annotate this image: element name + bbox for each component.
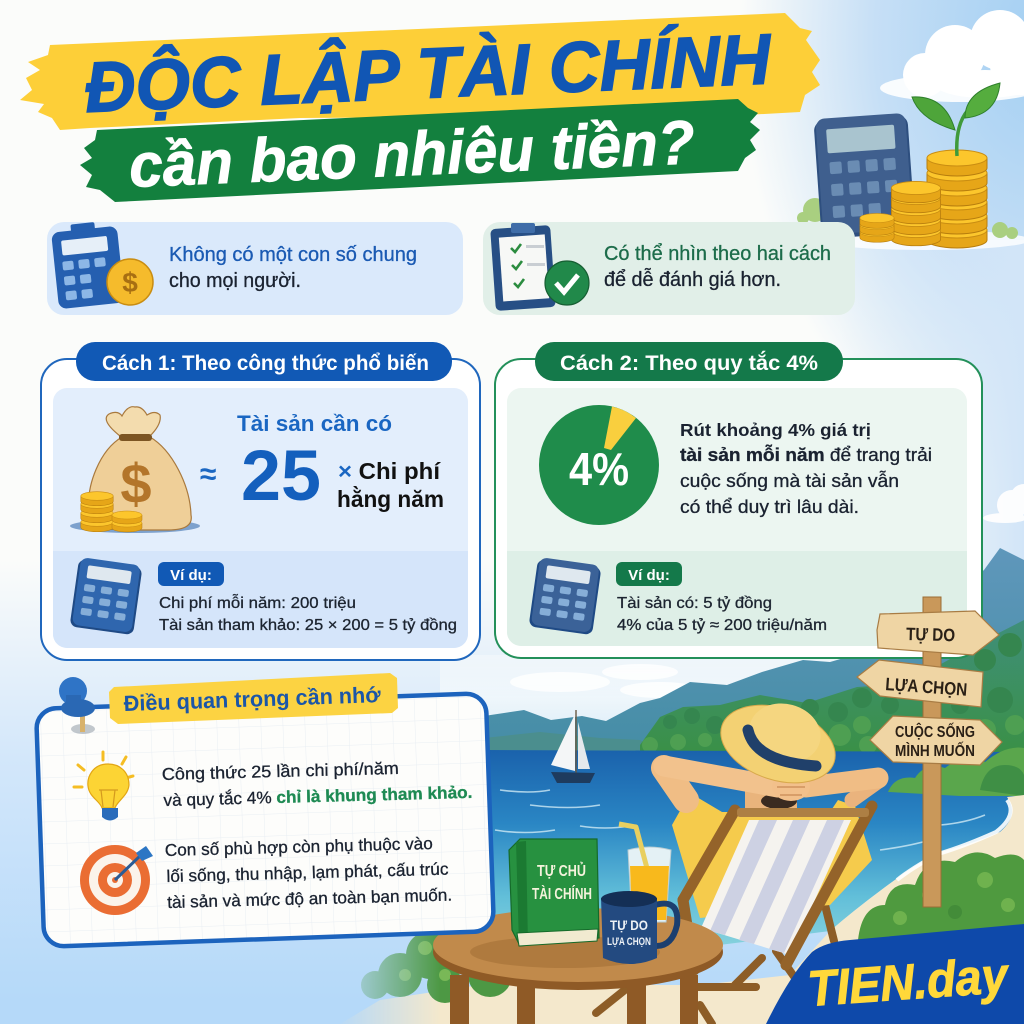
panel: cách 2 — [495, 342, 982, 658]
chair canvas — [701, 820, 851, 955]
sign: lựa chọn: LỰA CHỌN — [885, 674, 968, 700]
illustration: cloud top right — [880, 10, 1024, 102]
note text 1: Công thức 25 lần chi phí/năm — [162, 759, 399, 784]
icon: light bulb — [74, 752, 133, 820]
info box: hai cách: để dễ đánh giá hơn. — [604, 268, 781, 291]
mug: LỰA CHỌN — [607, 936, 651, 948]
info box: không có con số chung: cho mọi người. — [169, 270, 301, 292]
formula: hằng năm — [337, 485, 444, 512]
coin stack medium — [891, 181, 941, 246]
note text 2: lối sống, thu nhập, lạm phát, cấu trúc — [166, 860, 449, 886]
low left shore — [490, 732, 642, 750]
sand beach — [340, 795, 1024, 1024]
illustration: beach scene — [340, 548, 1024, 1024]
pie chart: 4%: 4% — [569, 443, 629, 495]
coin stack tall — [927, 150, 987, 248]
icon: target — [80, 845, 153, 915]
mug — [601, 891, 677, 964]
sign: tự do — [877, 611, 999, 655]
left arm — [664, 768, 686, 800]
yellow label: Điều quan trọng cần nhớ — [123, 682, 381, 716]
title line 2: cần bao nhiêu tiền? — [128, 108, 696, 201]
sky clouds — [510, 664, 700, 698]
small bushes — [797, 198, 1018, 239]
sign: cuộc sống mình muốn: MÌNH MUỐN — [895, 742, 975, 760]
hat crown — [743, 696, 827, 770]
signpost — [857, 597, 1002, 907]
note text 1: và quy tắc 4% chỉ là khung tham khảo. — [163, 783, 473, 810]
icon: clipboard with check — [490, 223, 589, 311]
pie chart: 4% — [539, 405, 659, 525]
note text 2: Con số phù hợp còn phụ thuộc vào — [165, 834, 433, 860]
left bushes — [361, 935, 510, 1003]
description text — [680, 420, 932, 517]
chair frame — [683, 806, 872, 970]
panel: cách 1 — [41, 342, 480, 660]
icon: pushpin — [59, 677, 95, 734]
description text: có thể duy trì lâu dài. — [680, 497, 859, 517]
logo badge: TIEN.day — [766, 924, 1024, 1024]
chair rear legs — [596, 893, 834, 1024]
peninsula bushes — [888, 748, 1024, 796]
sea wave highlights — [495, 790, 985, 850]
info box: hai cách: Có thể nhìn theo hai cách — [604, 243, 831, 265]
example text: Ví dụ: — [628, 567, 670, 584]
note text 2 — [165, 834, 452, 912]
illustration: man relaxing on beach chair — [596, 692, 880, 1024]
sign: tự do: TỰ DO — [906, 624, 955, 645]
hat band — [748, 730, 816, 766]
cloud right edge — [983, 484, 1024, 523]
book — [509, 839, 599, 946]
hat brim — [711, 692, 845, 796]
icon: calculator with coin: $ — [122, 267, 138, 298]
sprout — [912, 83, 1000, 156]
note text 1 — [162, 757, 473, 810]
info box: hai cách — [483, 222, 855, 315]
example text — [158, 562, 457, 634]
example text: Chi phí mỗi năm: 200 triệu — [159, 593, 356, 612]
calculator — [813, 113, 915, 239]
example background — [53, 551, 468, 648]
description text: Rút khoảng 4% giá trị — [680, 420, 871, 440]
pill header — [535, 342, 843, 381]
formula: Tài sản cần có — [237, 411, 392, 436]
formula — [200, 411, 444, 516]
table — [433, 908, 723, 1024]
title line 1: ĐỘC LẬP TÀI CHÍNH — [83, 19, 774, 128]
icon: calculator — [529, 557, 602, 635]
green brush band — [80, 99, 760, 202]
pill header: Cách 2: Theo quy tắc 4% — [560, 351, 818, 375]
sign: cuộc sống mình muốn — [870, 716, 1002, 765]
example text: Tài sản tham khảo: 25 × 200 = 5 tỷ đồng — [159, 617, 457, 634]
formula: 25 — [241, 437, 321, 516]
canvas stripes — [710, 820, 844, 953]
hillside foliage — [663, 633, 1022, 734]
note text 2: tài sản và mức độ an toàn bạn muốn. — [167, 886, 452, 912]
formula: ≈ — [200, 458, 216, 491]
info box: không có con số chung: Không có một con số chung — [169, 244, 417, 266]
green hillside — [640, 620, 1024, 755]
right arm — [852, 780, 880, 800]
yellow brush band — [20, 13, 820, 130]
hair — [761, 793, 797, 809]
book: TỰ CHỦ — [537, 861, 586, 880]
title banner — [20, 13, 820, 202]
shirt — [672, 793, 872, 918]
logo badge: TIEN.day: TIEN.day — [806, 947, 1011, 1017]
example text: Ví dụ: — [170, 567, 212, 584]
example background — [507, 551, 967, 646]
sign: cuộc sống mình muốn: CUỘC SỐNG — [895, 723, 975, 741]
sailboat — [551, 710, 595, 783]
illustration: right bushes — [858, 852, 1024, 945]
coin stack small — [860, 213, 894, 242]
icon: money bag: $ — [120, 452, 152, 515]
sign: lựa chọn — [857, 660, 983, 707]
mug: TỰ DO — [610, 918, 648, 933]
ground haze — [820, 230, 1024, 250]
example text: 4% của 5 tỷ ≈ 200 triệu/năm — [617, 617, 827, 634]
icon: calculator with coin — [51, 222, 153, 309]
example text: Tài sản có: 5 tỷ đồng — [617, 595, 772, 612]
sky — [440, 655, 839, 721]
example text — [616, 562, 827, 634]
pill header — [76, 342, 452, 381]
hands — [772, 773, 810, 801]
description text: tài sản mỗi năm để trang trải — [680, 444, 932, 465]
icon: money bag — [70, 407, 200, 533]
yellow label — [109, 673, 398, 724]
sea — [490, 750, 1014, 944]
panel: điều quan trọng cần nhớ — [36, 673, 494, 947]
pill header: Cách 1: Theo công thức phổ biến — [102, 352, 429, 375]
distant mountains — [484, 548, 1024, 800]
book: TÀI CHÍNH — [532, 884, 592, 903]
description text: cuộc sống mà tài sản vẫn — [680, 470, 899, 491]
icon: calculator — [70, 557, 143, 635]
neck — [745, 780, 797, 814]
orange juice glass — [619, 824, 671, 922]
info box: không có con số chung — [47, 222, 463, 315]
illustration: calculator, coins and sprout — [797, 83, 1024, 250]
formula: × Chi phí — [338, 458, 442, 484]
